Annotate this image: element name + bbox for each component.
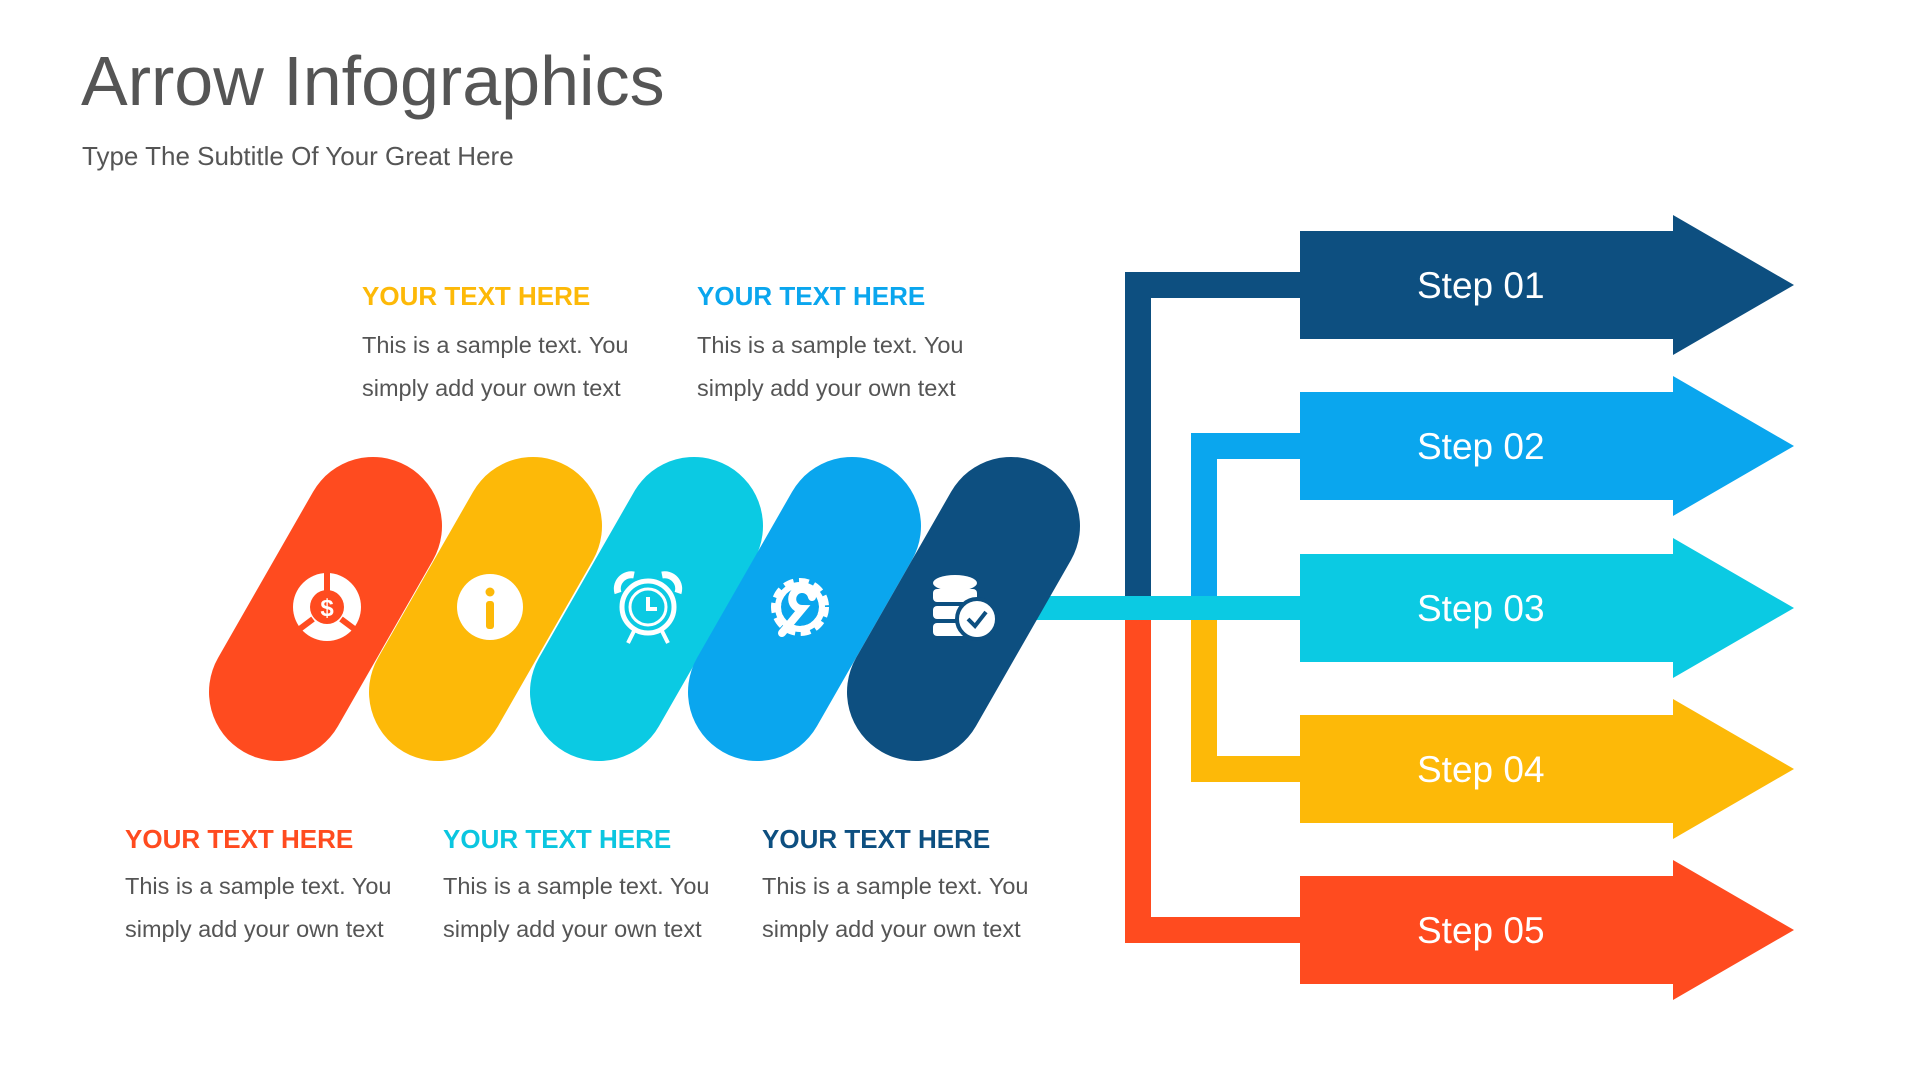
pill: yellow [438,526,533,692]
subtitle: Type The Subtitle Of Your Great Here [82,141,514,171]
text block: top blue: simply add your own text [697,375,956,401]
pill: red [278,526,373,692]
arrow: step 02: Step 02 [1417,426,1545,467]
arrow: step 04: Step 04 [1417,749,1545,790]
arrow: step 04 [1300,699,1794,839]
icon: gear wrench [776,583,824,633]
text block: bottom dark: simply add your own text [762,916,1021,942]
arrow: step 01: Step 01 [1417,265,1545,306]
text block: top yellow: simply add your own text [362,375,621,401]
arrow: step 02 [1300,376,1794,516]
text block: bottom red [125,824,391,942]
text block: bottom cyan: This is a sample text. You [443,873,709,899]
arrow: step 05: Step 05 [1417,910,1545,951]
text block: top blue: YOUR TEXT HERE [697,281,925,311]
text block: top blue: This is a sample text. You [697,332,963,358]
arrow: step 03 [1300,538,1794,678]
pill: dark [916,526,1011,692]
text block: bottom dark [762,824,1028,942]
text block: bottom red: YOUR TEXT HERE [125,824,353,854]
connectors [1020,285,1310,930]
text block: top yellow [362,281,628,401]
icon: info [457,574,523,640]
pill: cyan [599,526,694,692]
icon: dollar chart: $ [320,595,334,622]
text block: bottom red: simply add your own text [125,916,384,942]
arrow: step 05 [1300,860,1794,1000]
text block: bottom red: This is a sample text. You [125,873,391,899]
pill: blue [757,526,852,692]
text block: bottom dark: This is a sample text. You [762,873,1028,899]
text block: bottom dark: YOUR TEXT HERE [762,824,990,854]
text block: bottom cyan [443,824,709,942]
icon: alarm clock [617,575,679,643]
text block: top blue [697,281,963,401]
arrow: step 03: Step 03 [1417,588,1545,629]
arrow: step 01 [1300,215,1794,355]
icon: dollar chart [293,571,361,641]
text block: top yellow: This is a sample text. You [362,332,628,358]
text block: bottom cyan: simply add your own text [443,916,702,942]
icon: database check [933,575,997,639]
text block: bottom cyan: YOUR TEXT HERE [443,824,671,854]
text block: top yellow: YOUR TEXT HERE [362,281,590,311]
title: Arrow Infographics [81,42,665,120]
